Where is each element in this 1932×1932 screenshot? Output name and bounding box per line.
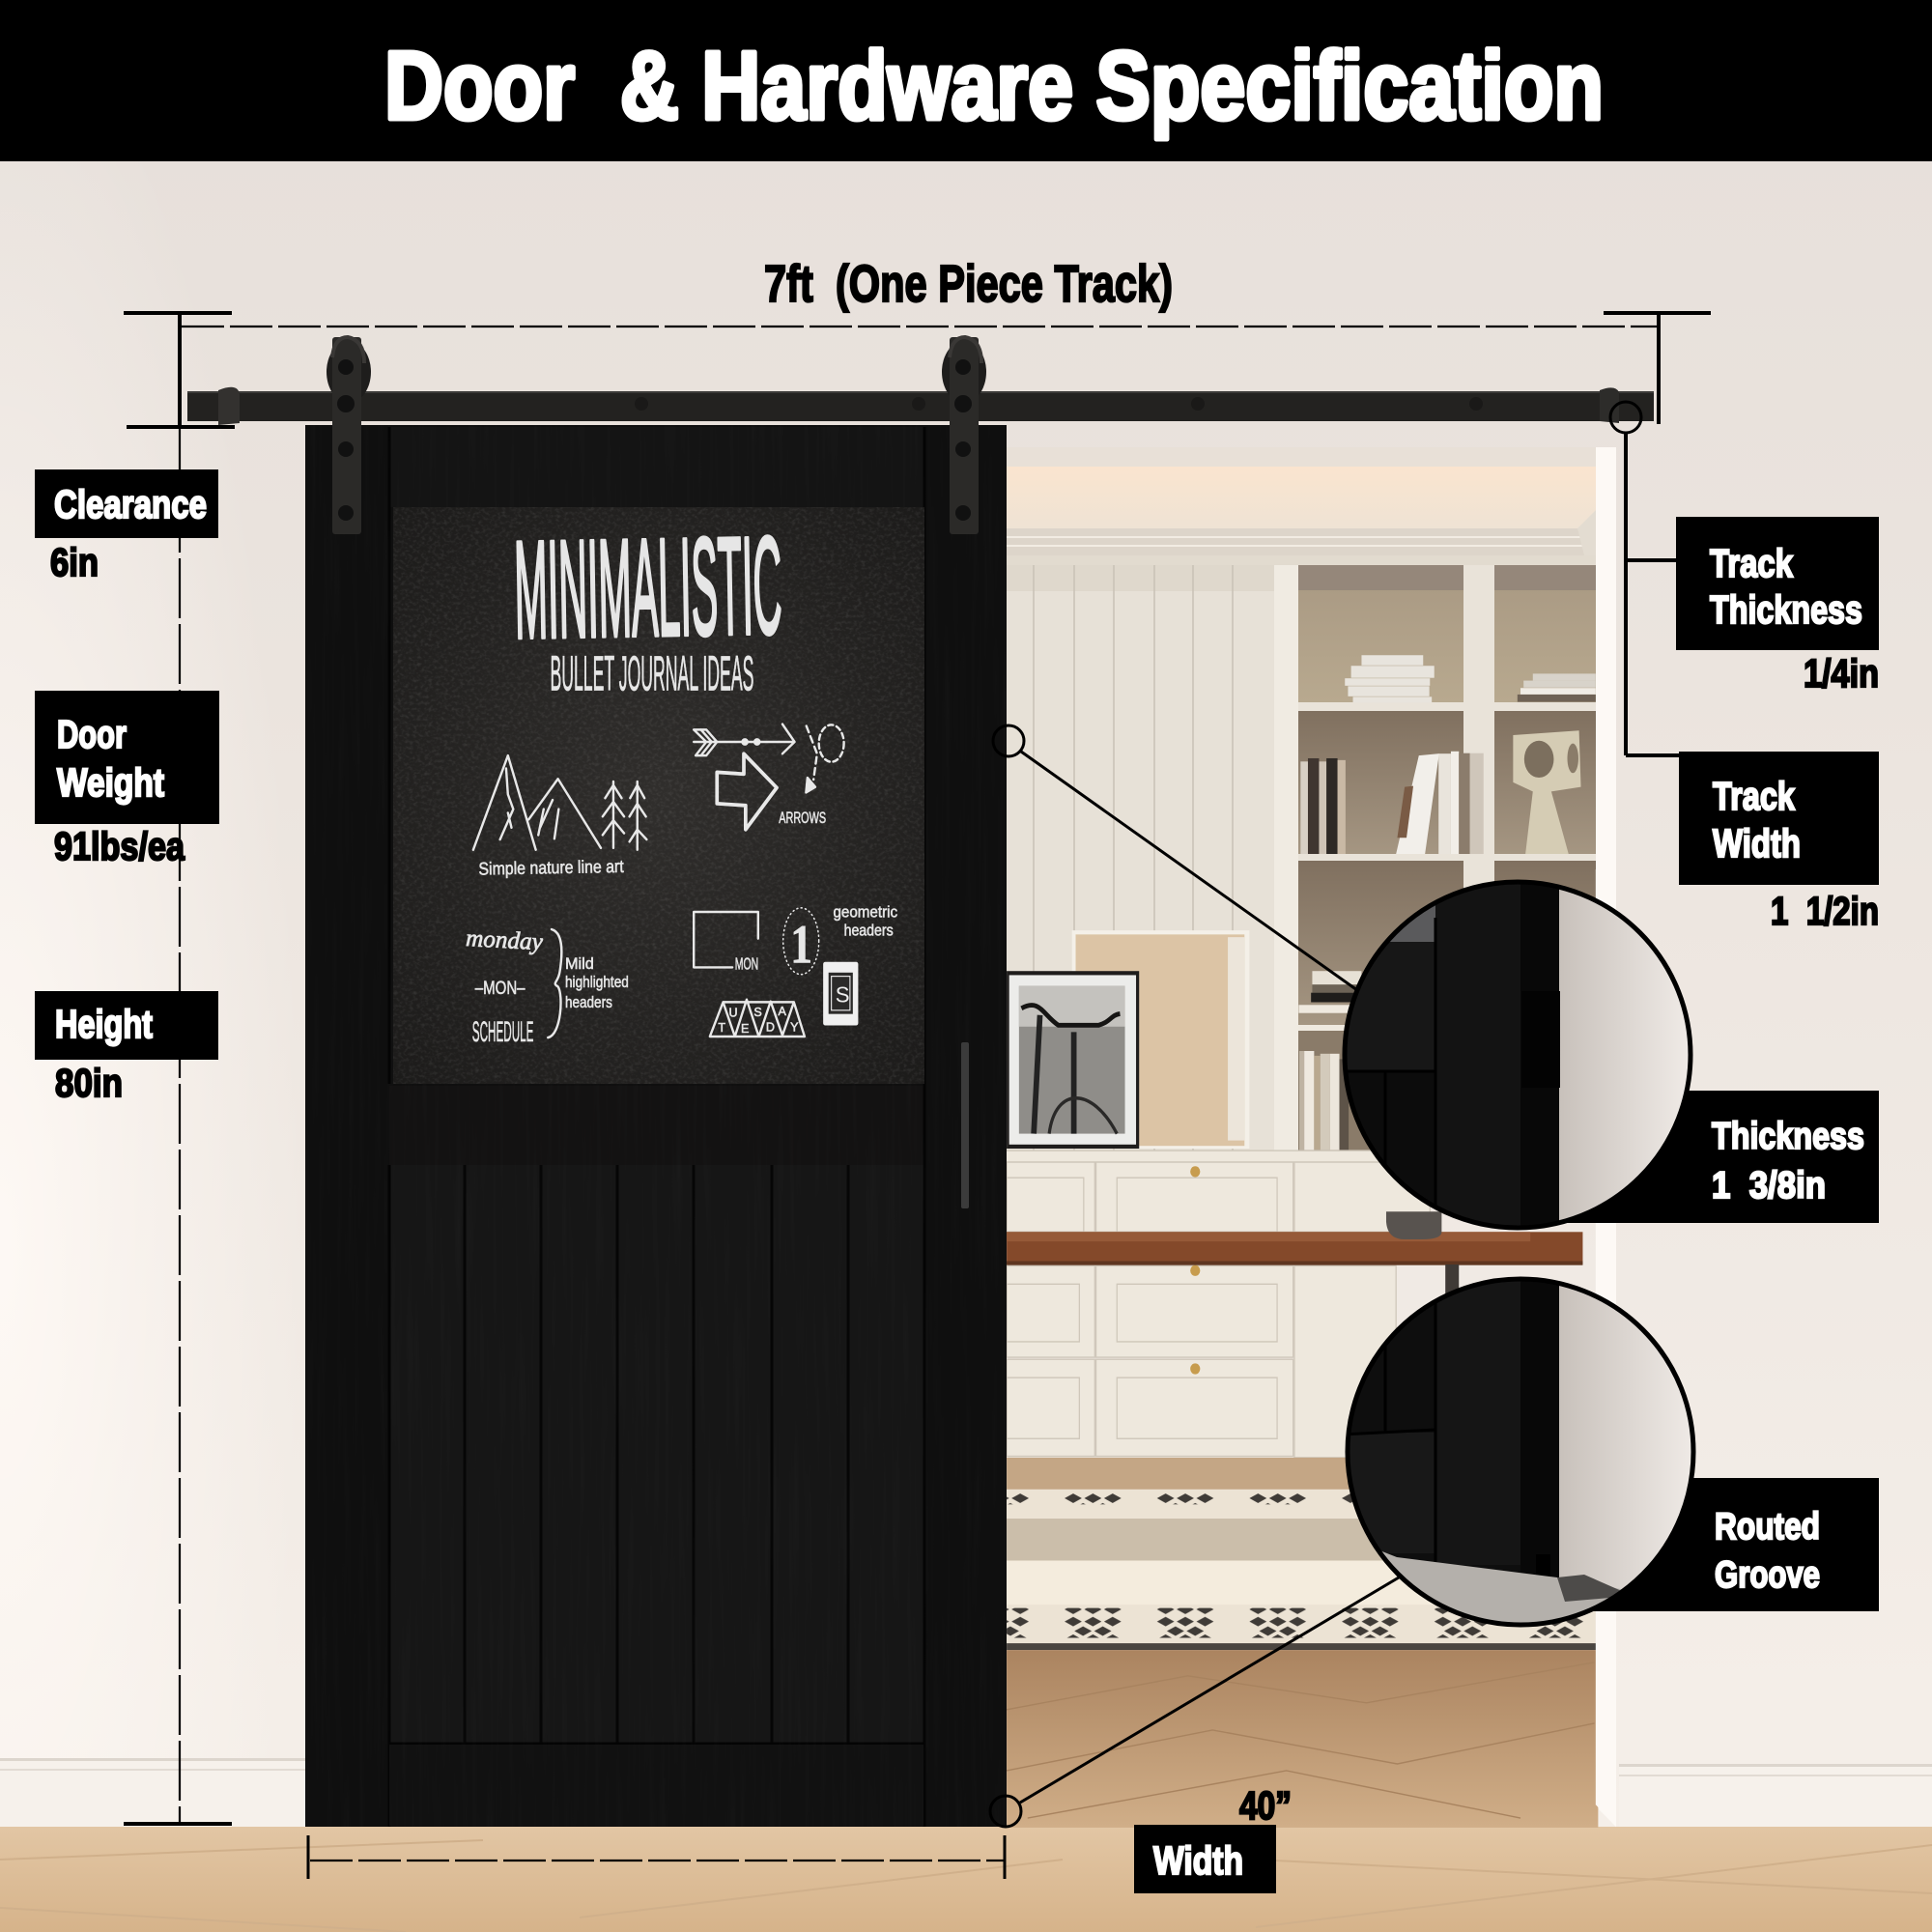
tuesday bunting xyxy=(710,1000,805,1037)
mountains doodle xyxy=(473,755,646,850)
mild highlighted headers caption xyxy=(565,954,629,1011)
tuesday bunting: U xyxy=(728,1006,738,1020)
label: door weight: Door xyxy=(57,712,127,756)
label: door weight: Weight xyxy=(57,760,164,805)
room floor strip xyxy=(1007,1458,1598,1490)
label: track width: Track xyxy=(1713,774,1795,818)
bottom rail xyxy=(389,1745,923,1826)
caption: arrows: ARROWS xyxy=(779,809,826,827)
panelled back wall xyxy=(1007,555,1596,1154)
dimension: door width xyxy=(308,1835,1005,1879)
title: Door & Hardware Specification xyxy=(384,32,1604,140)
label: track width: Width xyxy=(1713,821,1801,866)
callout leader: door bottom groove xyxy=(990,1577,1399,1827)
label: thickness: 1 3/8in xyxy=(1712,1165,1826,1207)
label: door weight xyxy=(35,691,219,868)
door casing xyxy=(1007,447,1616,1827)
label: track thickness: Track xyxy=(1710,541,1793,585)
left door hanger xyxy=(327,337,371,534)
text: MINIMALISTIC xyxy=(513,507,783,668)
callout lines: track xyxy=(1610,402,1679,755)
label: track width: 1 1/2in xyxy=(1771,889,1879,933)
tuesday bunting: D xyxy=(766,1019,775,1034)
crown moulding xyxy=(1007,510,1596,555)
label: width: 40” xyxy=(1239,1783,1292,1828)
framed art and cabinets xyxy=(991,869,1616,1828)
tuesday bunting: T xyxy=(718,1020,725,1035)
bicycle photo xyxy=(1007,971,1139,1149)
top rail xyxy=(389,427,924,507)
room seen through the doorway xyxy=(991,447,1616,1828)
S block: S xyxy=(836,982,850,1007)
wood floor xyxy=(0,1827,1932,1932)
bookshelf xyxy=(1274,565,1596,1154)
label: thickness: Thickness xyxy=(1712,1116,1864,1157)
label: height xyxy=(35,991,218,1105)
label: routed groove: Groove xyxy=(1715,1554,1820,1596)
canvas art xyxy=(1072,930,1249,1149)
tuesday bunting: Y xyxy=(790,1019,799,1034)
magnifier: routed groove xyxy=(1343,1275,1700,1642)
geometric headers caption: geometric xyxy=(834,902,897,921)
number one badge xyxy=(783,908,819,976)
dimension: track length xyxy=(124,255,1711,427)
number one badge: 1 xyxy=(790,915,812,976)
warm cove light xyxy=(1007,467,1596,528)
label: door weight: 91lbs/ea xyxy=(54,824,185,868)
label: height: Height xyxy=(55,1002,153,1046)
magnifier: door thickness xyxy=(1343,879,1694,1231)
sliding track xyxy=(187,387,1654,425)
label: thickness xyxy=(1546,1091,1879,1223)
left end stop xyxy=(218,387,240,425)
chalk lettering and doodles xyxy=(466,507,897,1048)
tuesday bunting: E xyxy=(741,1021,749,1036)
soffit xyxy=(1007,447,1596,467)
label: clearance: 6in xyxy=(50,540,99,584)
barn door xyxy=(305,425,1007,1827)
label: track width xyxy=(1679,752,1879,933)
tuesday bunting: S xyxy=(753,1005,762,1019)
right door hanger xyxy=(942,337,986,534)
callout leader: door edge thickness xyxy=(993,725,1364,995)
casing strip over room floor xyxy=(1596,869,1616,1827)
S block xyxy=(823,962,858,1026)
cabinets xyxy=(991,1151,1430,1458)
handle xyxy=(961,1042,969,1208)
title bar xyxy=(0,0,1932,161)
geometric headers caption: headers xyxy=(844,921,894,940)
caption: nature line art: Simple nature line art xyxy=(478,857,624,879)
mild highlighted headers caption: highlighted xyxy=(565,973,629,991)
right end stop xyxy=(1600,387,1619,423)
label: track thickness: 1/4in xyxy=(1804,651,1879,696)
label: height: 80in xyxy=(55,1061,123,1105)
label: routed groove: Routed xyxy=(1715,1506,1820,1548)
chalkboard xyxy=(393,507,924,1084)
label: track thickness: Thickness xyxy=(1710,587,1862,632)
height bottom bar xyxy=(124,1822,232,1826)
baseboards xyxy=(0,1758,1932,1827)
chalk lettering and doodles: BULLET JOURNAL IDEAS xyxy=(550,645,753,701)
mild highlighted headers caption: headers xyxy=(565,993,612,1011)
label: width xyxy=(1134,1783,1292,1893)
chalk lettering and doodles: SCHEDULE xyxy=(472,1016,533,1048)
geometric header box xyxy=(694,912,758,974)
mild highlighted headers caption: Mild xyxy=(565,954,594,973)
rug xyxy=(1007,1490,1598,1650)
label: width: Width xyxy=(1153,1838,1243,1883)
geometric headers caption xyxy=(833,902,897,940)
desk shelf books xyxy=(1298,971,1361,1150)
room floor xyxy=(1007,1650,1598,1828)
arrow doodles xyxy=(694,724,844,830)
track bolts xyxy=(635,397,1483,411)
label: clearance: Clearance xyxy=(54,482,207,526)
MON label: –MON– xyxy=(475,978,526,998)
books and sculpture xyxy=(1300,655,1596,854)
curly brace xyxy=(548,929,561,1037)
bowl xyxy=(1386,1211,1441,1239)
tuesday bunting: A xyxy=(779,1004,786,1018)
mid rail xyxy=(389,1086,924,1165)
dimension: height line xyxy=(179,427,181,1824)
wood grain xyxy=(305,425,1007,1827)
plank panel xyxy=(389,427,924,1827)
monday script: monday xyxy=(466,925,544,955)
track length label: 7ft (One Piece Track) xyxy=(764,255,1173,313)
table xyxy=(1007,1232,1582,1319)
label: track thickness xyxy=(1676,517,1879,696)
label: clearance xyxy=(35,469,218,584)
label: routed groove xyxy=(1546,1478,1879,1611)
geometric header box: MON xyxy=(735,953,758,974)
